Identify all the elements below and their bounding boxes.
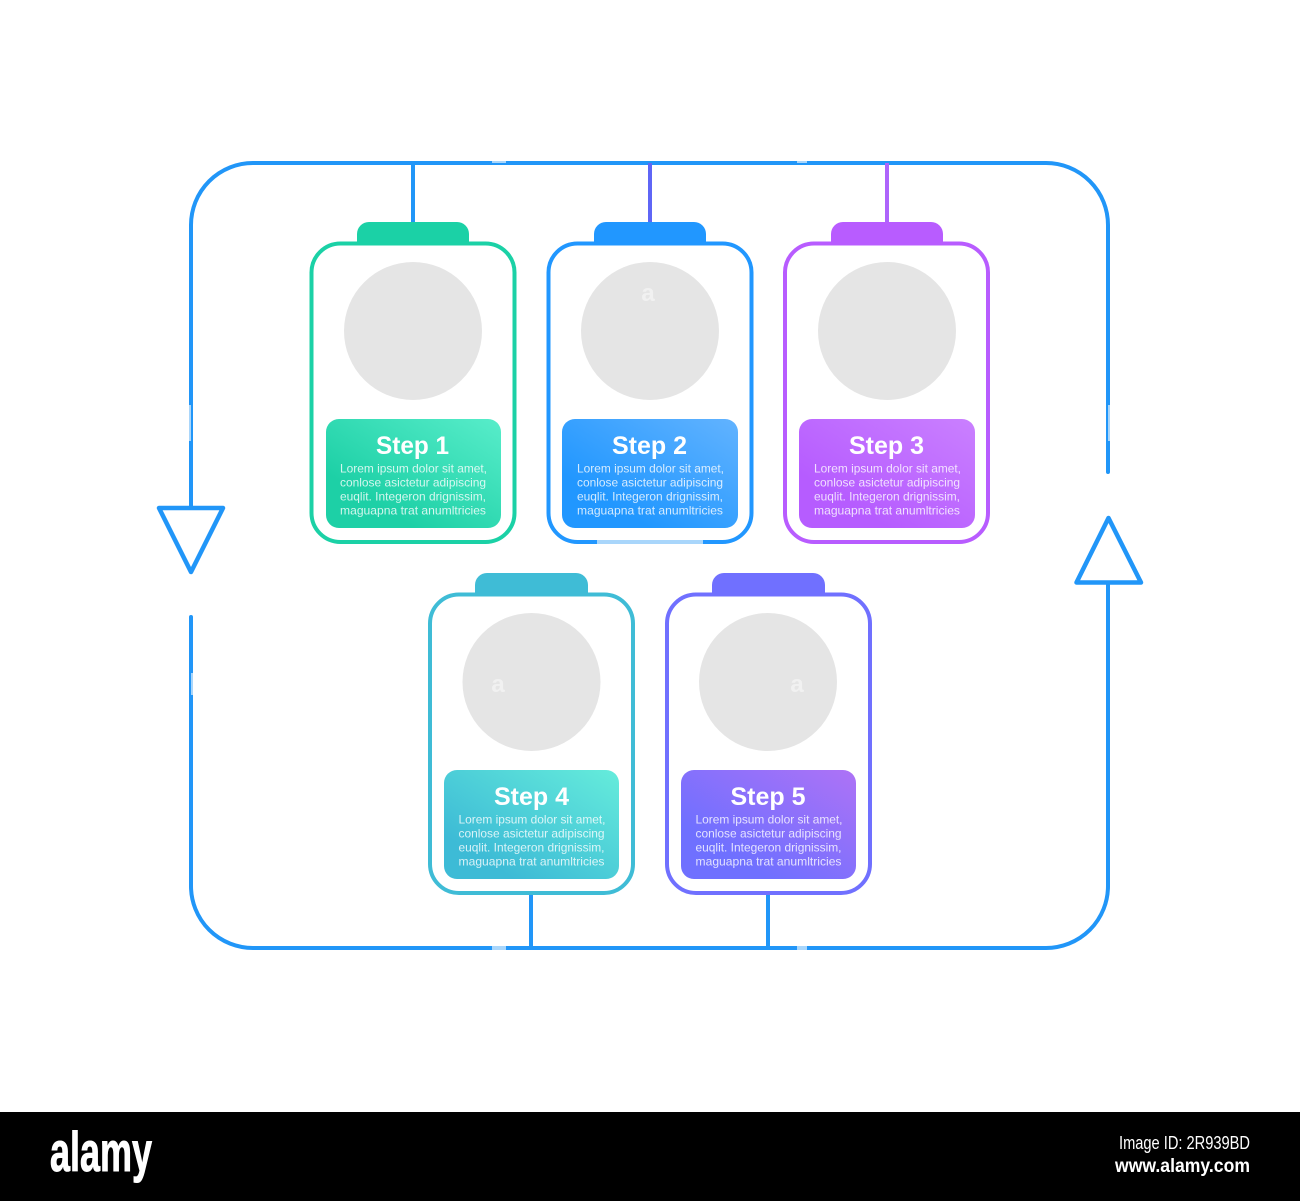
heading: Step 2: [612, 432, 687, 460]
text panel: [681, 770, 856, 879]
body text: [577, 462, 724, 518]
website: www.alamy.com: [1114, 1156, 1250, 1177]
body text: conlose asictetur adipiscing: [696, 826, 842, 840]
body text: Lorem ipsum dolor sit amet,: [696, 812, 842, 826]
text panel: [562, 419, 738, 528]
connector: step 2: [648, 163, 652, 223]
body text: conlose asictetur adipiscing: [458, 826, 604, 840]
card: step 4: [430, 573, 633, 893]
card tab: [475, 573, 588, 597]
process loop frame: [191, 163, 1108, 948]
body text: euqlit. Integeron drignissim,: [577, 490, 723, 504]
heading: Step 1: [376, 432, 449, 460]
upper frame line: [191, 163, 1108, 508]
body text: euqlit. Integeron drignissim,: [814, 490, 960, 504]
watermark fragment: a: [641, 280, 655, 307]
connector: step 4: [529, 892, 533, 948]
body text: conlose asictetur adipiscing: [814, 476, 960, 490]
body text: maguapna trat anumltricies: [577, 504, 723, 518]
body text: maguapna trat anumltricies: [340, 504, 486, 518]
body text: [458, 812, 606, 868]
card: step 5: [667, 573, 870, 893]
body text: Lorem ipsum dolor sit amet,: [814, 462, 961, 476]
footer bar: [0, 1112, 1300, 1201]
body text: euqlit. Integeron drignissim,: [458, 840, 604, 854]
card outline: [667, 594, 870, 893]
connector: step 1: [411, 163, 415, 223]
card outline: [430, 594, 633, 893]
card: step 3: [785, 222, 988, 542]
image placeholder circle: [699, 613, 837, 751]
lower frame line: [191, 583, 1108, 948]
heading: Step 5: [730, 783, 806, 811]
body text: Lorem ipsum dolor sit amet,: [577, 462, 724, 476]
image placeholder circle: [818, 262, 956, 400]
logo: alamy: alamy: [50, 1120, 152, 1183]
text panel: [799, 419, 975, 528]
arrow: up on right side: [1076, 518, 1141, 582]
body text: maguapna trat anumltricies: [814, 504, 960, 518]
body text: conlose asictetur adipiscing: [340, 476, 486, 490]
card tab: [712, 573, 825, 597]
connector: step 5: [766, 892, 770, 948]
body text: conlose asictetur adipiscing: [577, 476, 723, 490]
body text: maguapna trat anumltricies: [696, 854, 842, 868]
connector: step 3: [885, 163, 889, 223]
image id: Image ID: 2R939BD: [1119, 1133, 1250, 1153]
watermark fragment: a: [491, 671, 505, 698]
card tab: [831, 222, 943, 246]
card tab: [357, 222, 469, 246]
text panel: [444, 770, 619, 879]
image placeholder circle: [462, 613, 600, 751]
card: step 1: [312, 222, 514, 542]
watermark fragment: a: [790, 671, 804, 698]
watermark band on card edge: [597, 540, 703, 544]
card tab: [594, 222, 706, 246]
arrow: down on left side: [159, 508, 223, 572]
heading: Step 3: [849, 432, 924, 460]
card outline: [785, 244, 988, 542]
text panel: [326, 419, 501, 528]
body text: Lorem ipsum dolor sit amet,: [458, 812, 606, 826]
body text: euqlit. Integeron drignissim,: [340, 490, 486, 504]
card outline: [548, 244, 752, 542]
body text: euqlit. Integeron drignissim,: [696, 840, 842, 854]
body text: Lorem ipsum dolor sit amet,: [340, 462, 487, 476]
body text: [696, 812, 842, 868]
body text: [340, 462, 487, 518]
body text: maguapna trat anumltricies: [458, 854, 604, 868]
heading: Step 4: [494, 783, 569, 811]
image placeholder circle: [581, 262, 719, 400]
card: step 2: [548, 222, 752, 544]
body text: [814, 462, 961, 518]
image placeholder circle: [344, 262, 482, 400]
card outline: [312, 244, 514, 542]
